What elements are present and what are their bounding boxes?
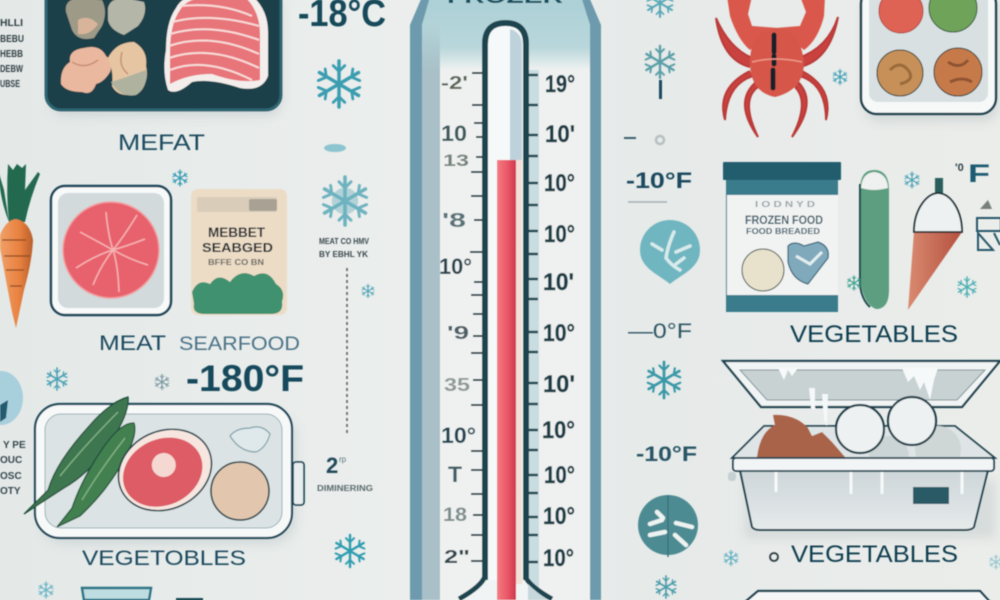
icon: snowflake mid right column [648,362,680,398]
right scale labels [542,71,575,572]
left scale labels: 10 [441,121,467,146]
cooler shadow [745,480,995,538]
left scale labels: '9 [447,323,469,343]
text block: left tiny notes lower [0,440,26,497]
icon: carrot [0,164,40,328]
small dash and ring [624,136,664,144]
text block: left tiny notes lower: OSC [0,471,22,482]
panel: meat tray top left [46,0,282,116]
label: minus 10 F upper [626,168,692,202]
left scale labels: 35 [444,375,470,395]
icon: ham slice [105,414,225,526]
label: vegetables lower: VEGETABLES [791,541,958,568]
icon: brown meat chunks [757,415,845,457]
crab body [750,28,804,97]
right scale labels: 10° [543,545,574,572]
icon: pale snowflake [323,177,367,225]
text block: 2 inch note: DIMINERING [317,484,373,493]
icon: shellfish pieces [61,0,147,95]
text: package label: FROZEN FOOD [745,213,823,227]
right scale labels: 10° [542,417,575,444]
left scale labels: 13 [443,151,469,170]
icon: snowflake [318,61,360,107]
icon: top snowflake right column [647,0,673,17]
text: package label: FOOD BREADED [746,227,820,236]
left scale labels [439,73,476,567]
panel: seafood package [191,189,287,315]
icon: brown patty [877,50,923,96]
text block: left tiny notes top: HLLI [0,18,23,29]
panel: food package right [723,162,841,312]
red liquid column [516,160,522,584]
text block: 2 inch note [317,453,373,493]
text: package label: MEBBET [208,224,265,240]
label: meat seafood [99,332,300,355]
cooler label [913,487,949,504]
cooler front [740,470,988,530]
text: package label: BFFE CO BN [208,258,264,267]
icon: round cookie [742,249,784,291]
icon: marbled meat slab [164,0,268,92]
icon: white and red cone vegetable [908,178,962,310]
left scale labels: -2' [441,73,468,93]
icon: dark teal snowflake badge [638,495,698,557]
right scale labels: 10° [544,170,575,197]
text block: small note beside dashed line [319,237,370,259]
text block: left tiny notes top: UBSE [0,79,20,90]
label: minus 10 F lower: -10°F [636,443,697,466]
text block: 2 inch note: 2 [326,453,338,478]
icon: blue badge at left edge [0,371,23,425]
label: vegetables upper: VEGETABLES [790,321,958,348]
label: degrees F top right: '0 [955,162,964,174]
text: package label: SEABGED [202,240,273,255]
label: minus 10 F middle: —0°F [628,320,692,343]
text: package label: I O D N Y D [755,200,815,209]
icon: round meat cut [63,202,159,298]
icon: red tomato slice [879,0,923,33]
right scale labels: 10' [543,269,574,296]
panel: meat tray middle [51,186,171,315]
label: meat: MEFAT [118,130,205,155]
panel: vegetable tray [24,397,304,544]
icon: blue frozen pack [788,242,828,284]
right scale labels: 10' [543,371,575,398]
heading: minus 180 F: -180°F [186,358,304,399]
icon: small snowflake near tray [173,170,187,186]
left scale labels: 10° [439,254,472,279]
label: degrees F top right: F [968,160,990,188]
text block: small note beside dashed line: BY EBHL YK [319,250,368,259]
crab legs [716,17,838,137]
panel: bottom right tray edge [745,591,990,600]
icon: green cucumber [860,170,889,309]
icon: bottom container [82,588,203,600]
label: meat seafood: SEARFOOD [179,334,300,355]
text block: small note beside dashed line: MEAT CO HMV [319,237,370,246]
icon: frosted snowflake with stem [646,46,674,99]
icon: snowflake lower [336,535,364,567]
icon: small snowflakes around vegetables [848,172,976,297]
panel: food tray top right [861,0,999,122]
cooler back wall [732,426,995,458]
right scale labels: 10° [544,462,575,489]
icon: round dumpling [211,462,269,520]
right scale labels: 10° [544,221,575,248]
text: package label [202,224,273,267]
text block: 2 inch note: rp [339,455,347,464]
label: vegetobles: VEGETOBLES [82,547,246,570]
left scale labels: '8 [442,210,466,232]
right scale labels: 10° [543,320,575,347]
text block: left tiny notes top: BEBU [0,34,24,45]
text block: left tiny notes top [0,18,24,90]
icon: teal snowflake badge [640,220,700,284]
left scale labels: 18 [443,505,467,526]
icon: cucumbers [24,397,135,527]
text block: left tiny notes lower: OTY [0,486,21,497]
text: package label [745,200,823,236]
chart: thermometer [410,0,601,600]
icon: small snowflakes row [47,368,169,390]
label: meat seafood: MEAT [99,332,166,355]
bulb shoulders [459,576,552,600]
text block: left tiny notes lower: Y PE [3,440,26,451]
text block: left tiny notes top: DEBW [0,64,23,75]
left scale labels: 2" [444,547,470,567]
label: minus 10 F upper: -10°F [626,168,692,193]
icon: small bottom snowflake [39,582,53,598]
cooler lid [723,361,1000,407]
crab claws [727,0,778,50]
icon: frosted shell [230,427,270,452]
dashed vertical line [346,268,348,433]
left scale labels: T [448,462,463,487]
text block: left tiny notes lower: OUC [0,455,22,466]
left scale labels: 10° [441,423,476,448]
left ticks [470,73,483,561]
icon: small snowflake near crab [833,69,847,85]
panel: open cooler [723,361,1000,538]
right scale labels: 10° [543,503,575,530]
right scale labels: 19° [545,71,575,98]
icon: small snowflakes bottom right [656,550,1000,598]
icicles falling from lid [809,388,828,426]
right ticks [528,75,538,562]
label: degrees F top right [955,160,990,188]
icon: frost smudge [324,144,346,152]
cooler frost drips [776,472,962,494]
cooler side handle [728,472,736,481]
icon: right edge badge [977,200,1000,250]
text block: left tiny notes top: HEBB [0,49,23,60]
icon: small snowflake [362,284,374,298]
icon: frozen balls [836,397,961,476]
right scale labels: 10' [545,121,575,148]
thermometer body [410,0,601,600]
icon: leafy greens [192,273,283,314]
icon: orange patty [934,48,982,96]
icon: red crab [716,0,838,137]
glass tube [485,23,526,580]
icon: green slice [929,0,977,32]
